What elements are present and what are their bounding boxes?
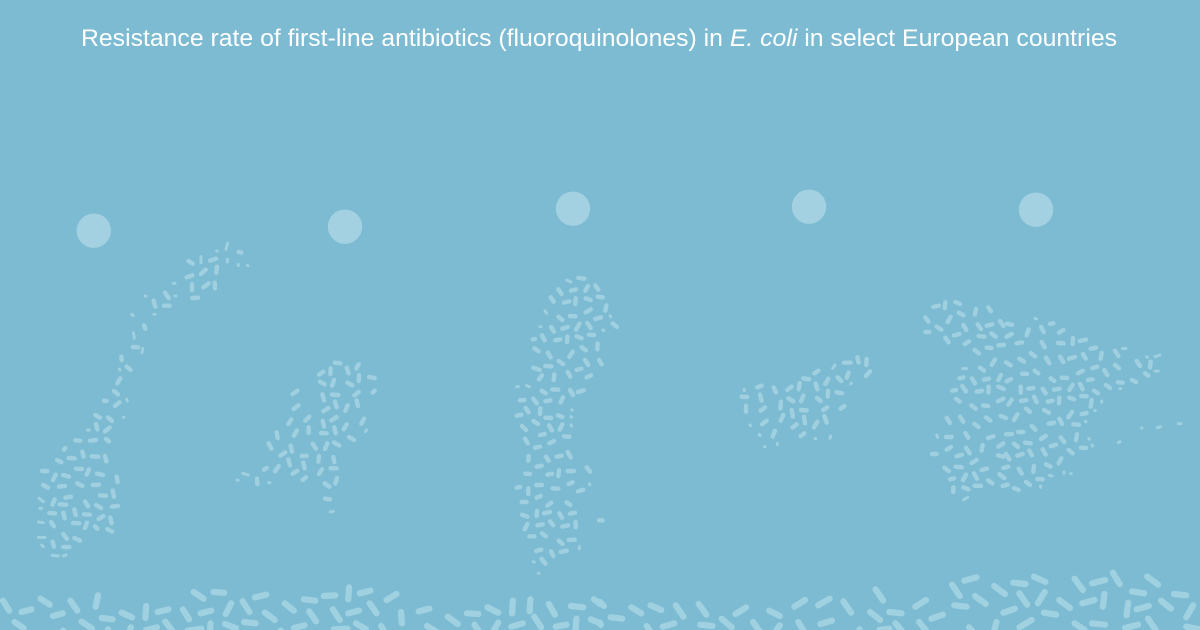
map: Spain made of bacteria — [925, 302, 1181, 500]
map: Sweden made of bacteria — [517, 278, 617, 573]
map: Denmark made of bacteria — [742, 357, 870, 447]
title: Resistance rate of first-line antibiotics (fluoroquinolones) in E. coli in select European countries — [81, 25, 1117, 52]
indicator circle: country 2 — [328, 210, 362, 244]
indicator circle: country 5 — [1019, 192, 1053, 227]
bacteria band: bottom left — [3, 587, 600, 630]
indicator circle: country 3 — [556, 192, 590, 226]
map: Finland made of bacteria — [237, 363, 375, 512]
bacteria band: bottom right — [600, 573, 1200, 630]
indicator circle: country 1 — [77, 214, 111, 248]
indicator circle: country 4 — [792, 190, 826, 224]
map: Norway made of bacteria — [38, 243, 248, 556]
